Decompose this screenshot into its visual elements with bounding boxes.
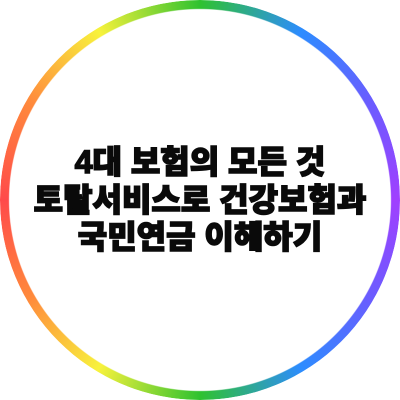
title: 4대 보험의 모든 것 xyxy=(75,144,325,180)
title xyxy=(34,144,366,255)
title: 국민연금 이해하기 xyxy=(78,219,322,255)
title: 토탈서비스로 건강보험과 xyxy=(34,182,366,218)
